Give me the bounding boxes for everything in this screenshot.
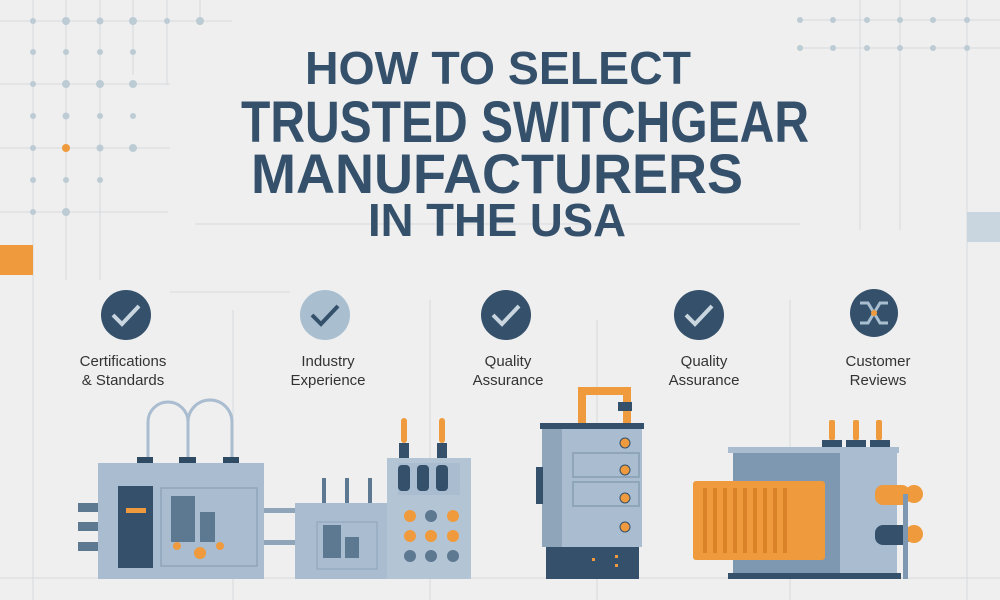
- label 1: [80, 353, 166, 389]
- label 3: [472, 353, 543, 389]
- icons row: [101, 289, 898, 340]
- icon: check 4: [674, 290, 724, 340]
- icon: check 3: [481, 290, 531, 340]
- machine 2: [295, 418, 471, 579]
- label 2: Experience: [290, 372, 366, 389]
- icon: check 2: [300, 290, 350, 340]
- label 5: [845, 353, 911, 389]
- machine 1: [78, 400, 296, 579]
- label 3: Quality: [485, 353, 531, 370]
- label 4: [668, 353, 739, 389]
- label 1: Certifications: [80, 353, 166, 370]
- label 1: & Standards: [82, 372, 164, 389]
- label 5: Reviews: [850, 372, 906, 389]
- machine 4: [693, 420, 923, 579]
- icon: reviews: [850, 289, 898, 337]
- icon: check 1: [101, 290, 151, 340]
- title: HOW TO SELECT: [305, 42, 691, 94]
- title: [241, 42, 809, 240]
- label 5: Customer: [845, 353, 911, 370]
- machine 3: [536, 391, 644, 579]
- label 4: Quality: [681, 353, 727, 370]
- label 2: [290, 353, 366, 389]
- title: MANUFACTURERS: [251, 142, 743, 205]
- title: TRUSTED SWITCHGEAR: [241, 90, 809, 155]
- label 4: Assurance: [669, 372, 739, 389]
- label 3: Assurance: [473, 372, 543, 389]
- label 2: Industry: [301, 353, 355, 370]
